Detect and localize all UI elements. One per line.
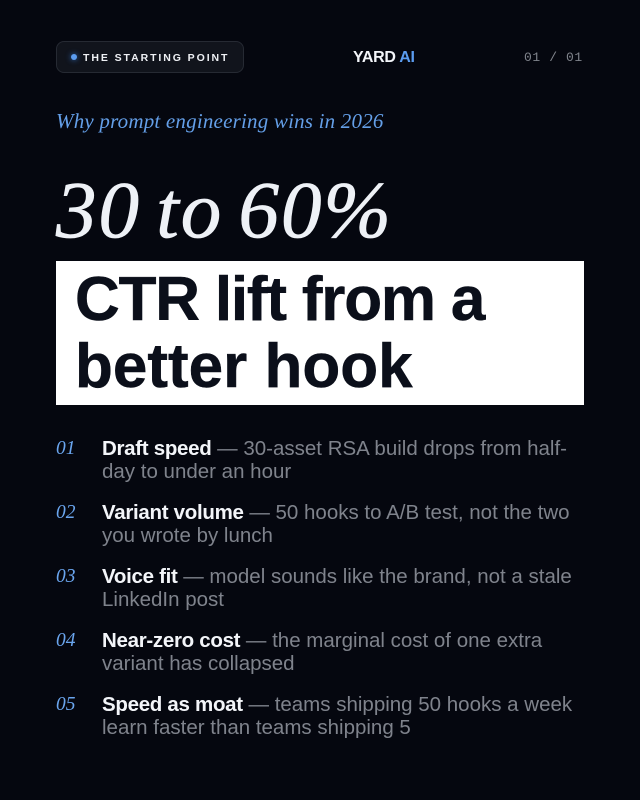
- text 05: [102, 693, 572, 739]
- subtitle: Why prompt engineering wins in 2026: [56, 109, 384, 133]
- text 04: Near-zero cost — the marginal cost of one extra: [102, 629, 542, 652]
- text 01: day to under an hour: [102, 460, 291, 483]
- text 05: learn faster than teams shipping 5: [102, 716, 411, 739]
- text 03: [102, 565, 572, 611]
- badge: the starting point: [56, 41, 244, 73]
- list item 04: [56, 629, 542, 675]
- page counter: 01 / 01: [524, 50, 583, 65]
- list item 03: [56, 565, 572, 611]
- number 03: 03: [56, 566, 76, 587]
- list item 05: [56, 693, 572, 739]
- highlight panel: [56, 261, 584, 405]
- text 04: [102, 629, 542, 675]
- text 02: Variant volume — 50 hooks to A/B test, not the two: [102, 501, 570, 524]
- highlight line 1: CTR lift from a: [75, 265, 484, 334]
- text 05: Speed as moat — teams shipping 50 hooks a week: [102, 693, 572, 716]
- icon: blue dot: [71, 54, 77, 60]
- number 02: 02: [56, 502, 76, 523]
- text 03: Voice fit — model sounds like the brand, not a stale: [102, 565, 572, 588]
- number 01: 01: [56, 438, 76, 459]
- text 01: [102, 437, 567, 483]
- highlight line 2: better hook: [75, 332, 413, 401]
- brand: Yard AI: YARD AI: [353, 49, 415, 66]
- text 03: LinkedIn post: [102, 588, 224, 611]
- text 04: variant has collapsed: [102, 652, 295, 675]
- text 02: you wrote by lunch: [102, 524, 273, 547]
- number 05: 05: [56, 694, 76, 715]
- text 02: [102, 501, 570, 547]
- headline stat: 30 to 60%: [56, 165, 393, 255]
- badge text: THE STARTING POINT: [83, 52, 229, 64]
- number 04: 04: [56, 630, 76, 651]
- list item 02: [56, 501, 570, 547]
- text 01: Draft speed — 30-asset RSA build drops from half-: [102, 437, 567, 460]
- list item 01: [56, 437, 567, 483]
